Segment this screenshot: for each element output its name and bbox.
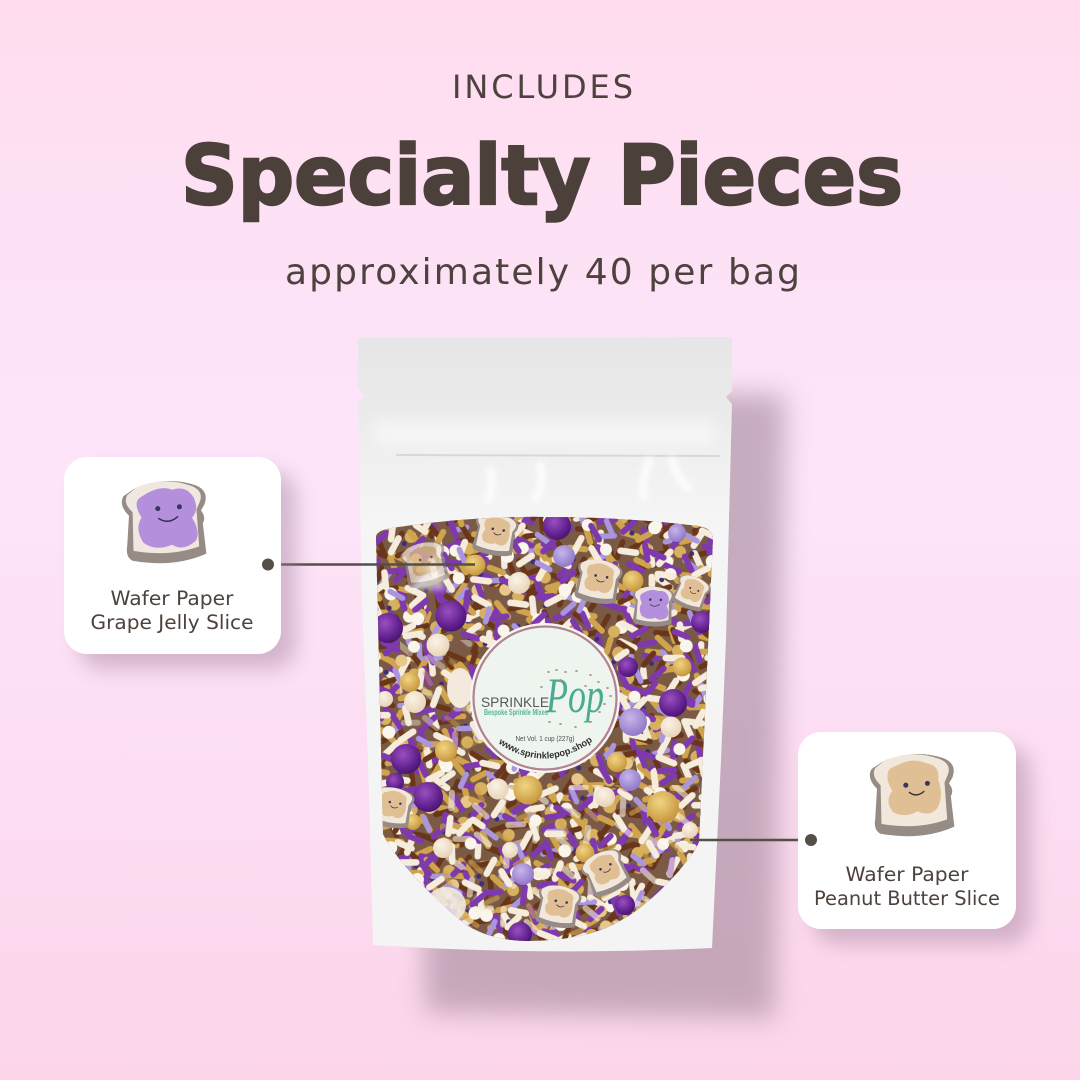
callout text: Wafer Paper	[110, 587, 235, 610]
callout text: Wafer Paper	[846, 863, 970, 886]
peanut butter toast pieces	[367, 509, 713, 932]
icon: grape jelly toast	[122, 481, 206, 563]
net volume: Net Vol. 1 cup (227g)	[516, 734, 574, 743]
bag shadow	[420, 385, 785, 1018]
callout card: grape jelly slice	[64, 457, 296, 669]
bag body	[358, 337, 732, 951]
connector dot	[805, 834, 817, 846]
icon: peanut butter toast	[870, 754, 954, 836]
lavender pearls	[512, 524, 686, 885]
sprinkle bag	[358, 337, 732, 952]
bag window with sprinkles	[367, 509, 720, 950]
script logo: Pop	[545, 667, 604, 723]
bag zip seal	[375, 420, 715, 446]
tagline: Bespoke Sprinkle Mixes	[484, 708, 548, 717]
callout card: peanut butter slice	[798, 732, 1031, 944]
connector: grape jelly	[268, 563, 475, 566]
subtitle: includes: INCLUDES	[452, 68, 633, 106]
website: www.sprinklepop.shop	[499, 738, 592, 760]
subheading: approximately 40 per bag	[285, 252, 800, 293]
brand name: SPRINKLE	[481, 694, 549, 710]
connector: peanut butter	[690, 839, 811, 841]
confetti	[541, 670, 611, 727]
gold pearls	[400, 554, 699, 862]
grape jelly toast piece	[633, 586, 674, 627]
connector dot	[262, 558, 274, 570]
cream pearls	[377, 572, 698, 858]
title: Specialty Pieces	[181, 129, 903, 224]
callout card: grape jelly slice: Grape Jelly Slice	[90, 611, 254, 634]
product label	[470, 623, 620, 773]
callout card: peanut butter slice: Peanut Butter Slice	[814, 887, 1000, 910]
purple sugar pearls	[373, 512, 713, 946]
